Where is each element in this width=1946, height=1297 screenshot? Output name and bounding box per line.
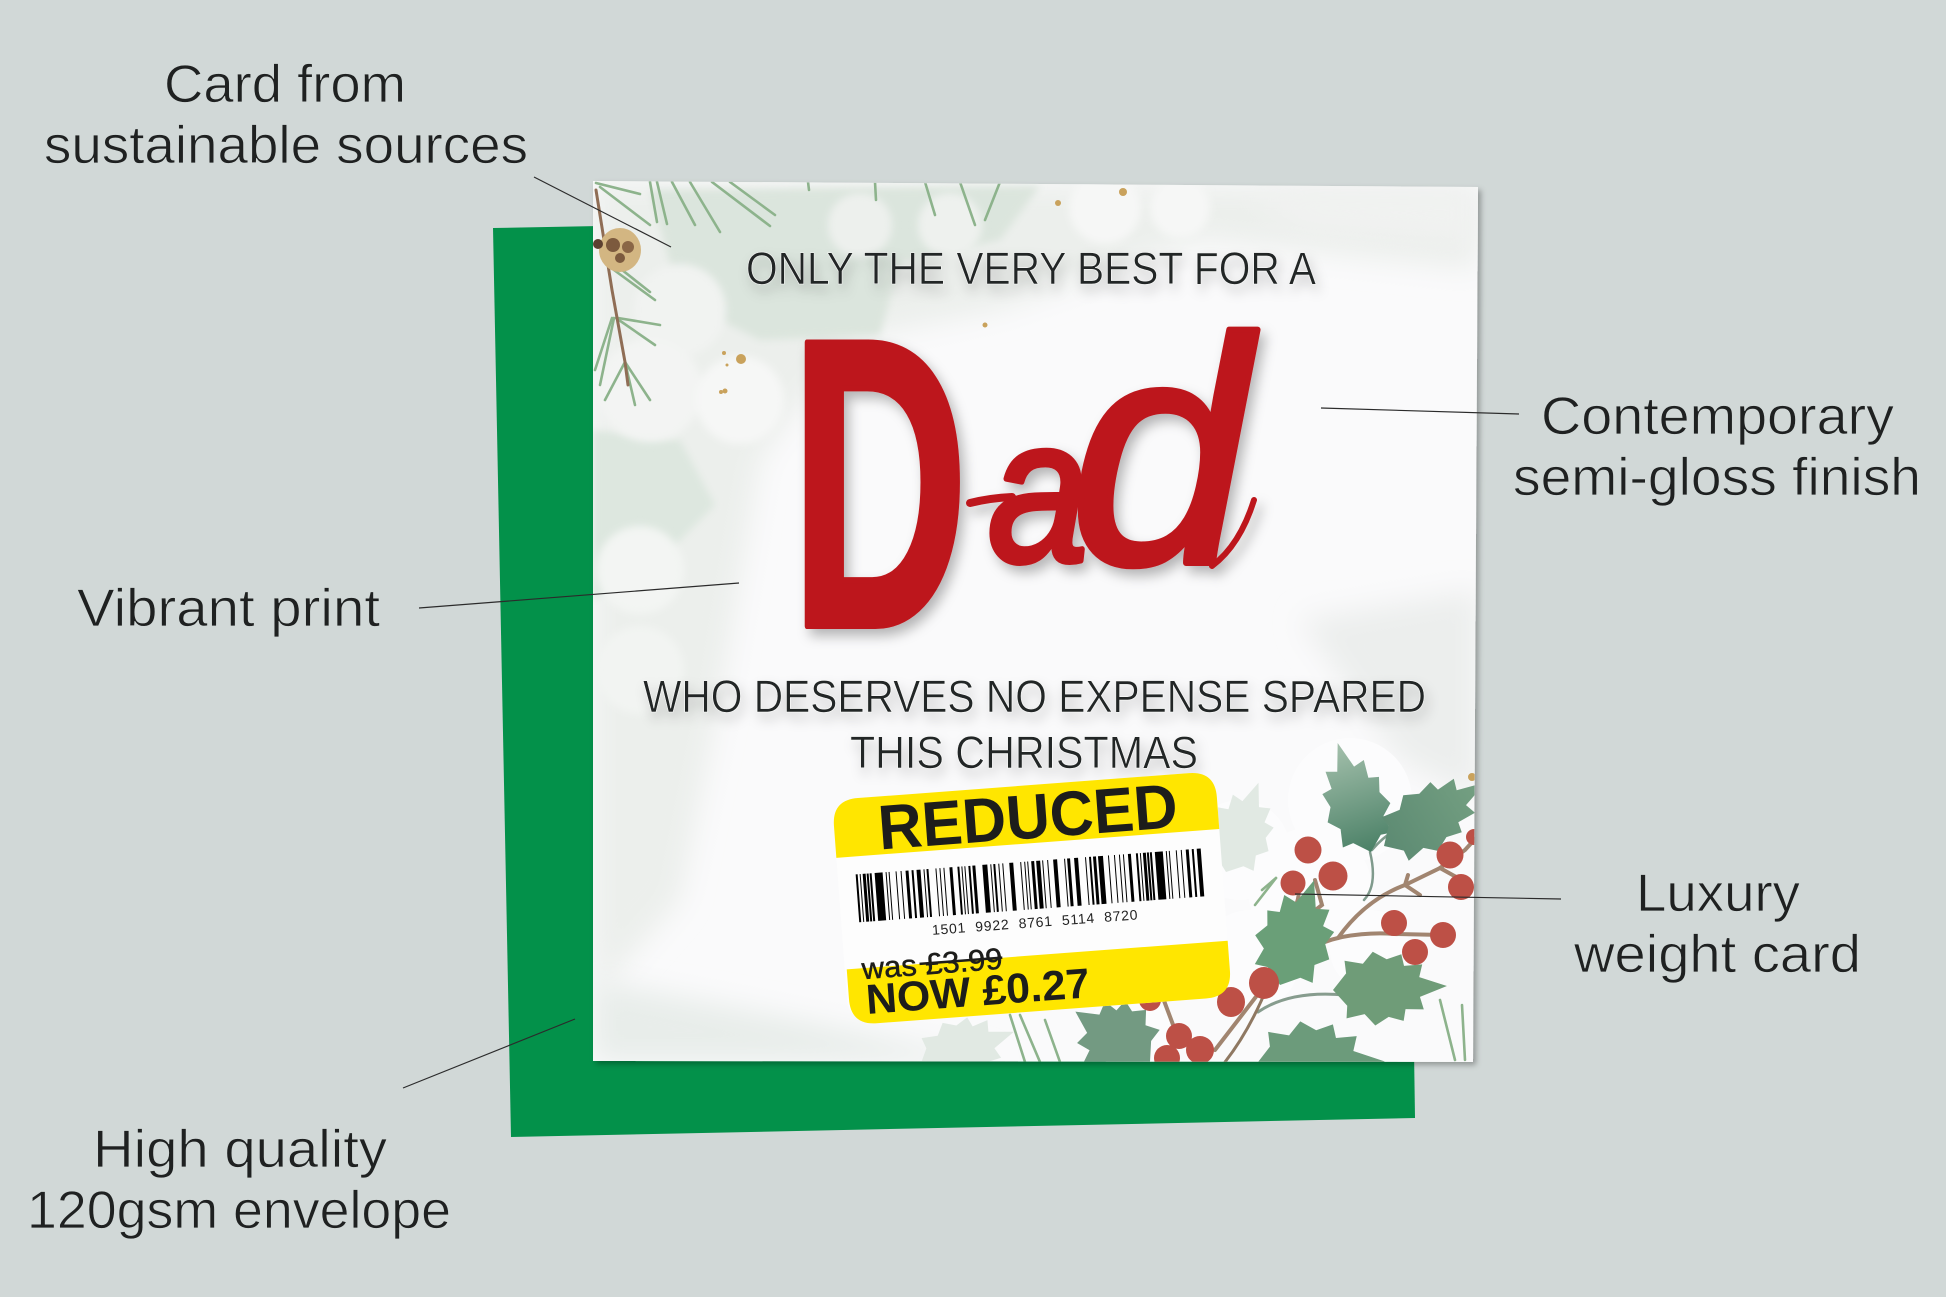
top card heading: ONLY THE VERY BEST FOR A [746,243,1316,294]
callout: vibrant print: Vibrant print [77,579,380,638]
barcode [857,872,1205,898]
callout: high quality 120gsm envelope: 120gsm envelope [27,1181,451,1240]
lower card message [643,671,1426,778]
greeting card [593,172,1503,1109]
lower card message: THIS CHRISTMAS [850,727,1198,778]
Dad script lettering: d [1070,273,1261,632]
callout: card from sustainable sources: Card from [164,55,406,114]
callout: card from sustainable sources [44,55,528,175]
now price: NOW £0.27 [864,959,1091,1023]
envelope [493,226,1415,1137]
callout: contemporary semi-gloss finish [1513,387,1921,507]
swash tail of d [1212,500,1254,566]
holly berries [1139,829,1482,1071]
lower card message: WHO DESERVES NO EXPENSE SPARED [643,671,1426,722]
callout: luxury weight card [1573,864,1861,984]
pine branches [595,182,1465,1062]
callout: card from sustainable sources: sustainable sources [44,116,528,175]
swash connecting D to a [970,497,1012,503]
gold specks [719,188,1476,781]
sticker bottom band [847,941,1232,1025]
Dad script lettering: D [790,252,969,713]
callout: luxury weight card: Luxury [1636,864,1801,923]
sticker top band [832,771,1219,858]
callout: high quality 120gsm envelope [27,1120,451,1240]
callout: high quality 120gsm envelope: High quality [93,1120,388,1179]
sticker heading: REDUCED [876,771,1180,864]
holly white blobs [1106,1062,1154,1063]
Dad script lettering: a [988,375,1088,605]
callout: contemporary semi-gloss finish: semi-gloss finish [1513,448,1921,507]
callout lines [403,177,1561,1088]
was price: was £3.99 [860,943,1004,986]
callout: luxury weight card: weight card [1573,925,1861,984]
reduced price sticker [832,768,1232,1025]
pinecone [593,228,641,272]
holly stems [1160,830,1476,1062]
holly leaves [1052,733,1503,1109]
background pale holly leaves [909,772,1289,1097]
card watercolour background [593,172,1503,1109]
barcode number: 1501 9922 8761 5114 8720 [931,906,1138,938]
callout: contemporary semi-gloss finish: Contemporary [1541,387,1895,446]
Dad script lettering [790,252,1261,713]
